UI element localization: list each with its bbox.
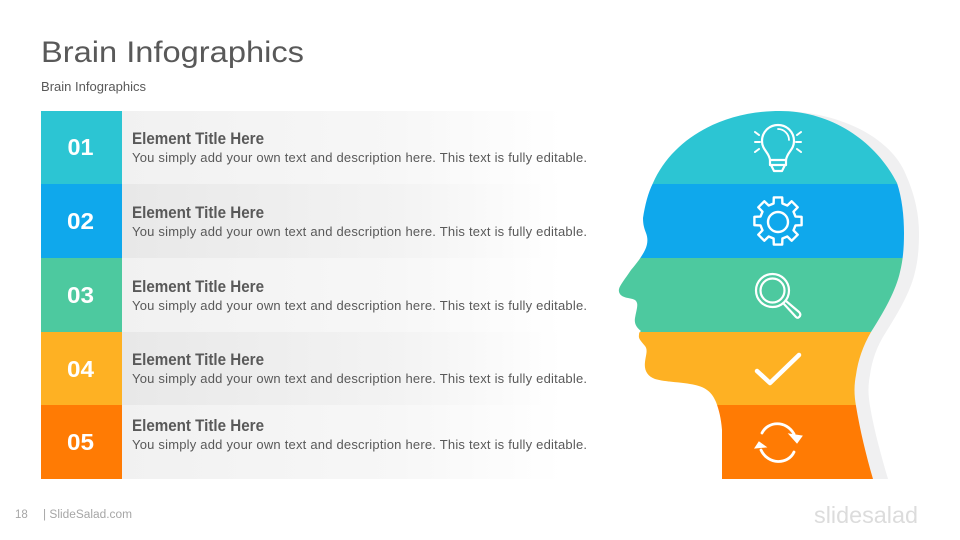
row 4: You simply add your own text and description here. This text is fully editable. [132, 371, 587, 386]
row 1 [41, 111, 587, 184]
subtitle: Brain Infographics [41, 80, 146, 94]
icon: magnifier [756, 274, 800, 318]
head silhouette [610, 105, 920, 479]
row 4: 04 [67, 356, 94, 382]
row 4 [41, 332, 587, 405]
row 1: You simply add your own text and description here. This text is fully editable. [132, 150, 587, 165]
footer source: | SlideSalad.com [43, 509, 132, 521]
title: Brain Infographics [41, 36, 304, 69]
icon: gear [754, 197, 802, 245]
icon: refresh arrows [755, 424, 802, 462]
row 5: Element Title Here [132, 417, 264, 435]
icon: light bulb [755, 125, 801, 171]
row 5: 05 [67, 429, 94, 455]
row 1: 01 [68, 134, 94, 160]
row 5: You simply add your own text and description here. This text is fully editable. [132, 437, 587, 452]
page number: 18 [15, 509, 28, 521]
row 5 [41, 405, 587, 479]
head shadow [780, 111, 919, 479]
row 4: Element Title Here [132, 351, 264, 369]
row 2: 02 [67, 208, 94, 234]
row 1: Element Title Here [132, 130, 264, 148]
row 3: Element Title Here [132, 278, 264, 296]
row 2: You simply add your own text and description here. This text is fully editable. [132, 224, 587, 239]
row 3: 03 [67, 282, 94, 308]
row 2: Element Title Here [132, 204, 264, 222]
row 3 [41, 258, 587, 332]
row 2 [41, 184, 587, 258]
logo: slidesalad [814, 502, 918, 528]
row 3: You simply add your own text and description here. This text is fully editable. [132, 298, 587, 313]
icon: check mark [757, 355, 799, 383]
